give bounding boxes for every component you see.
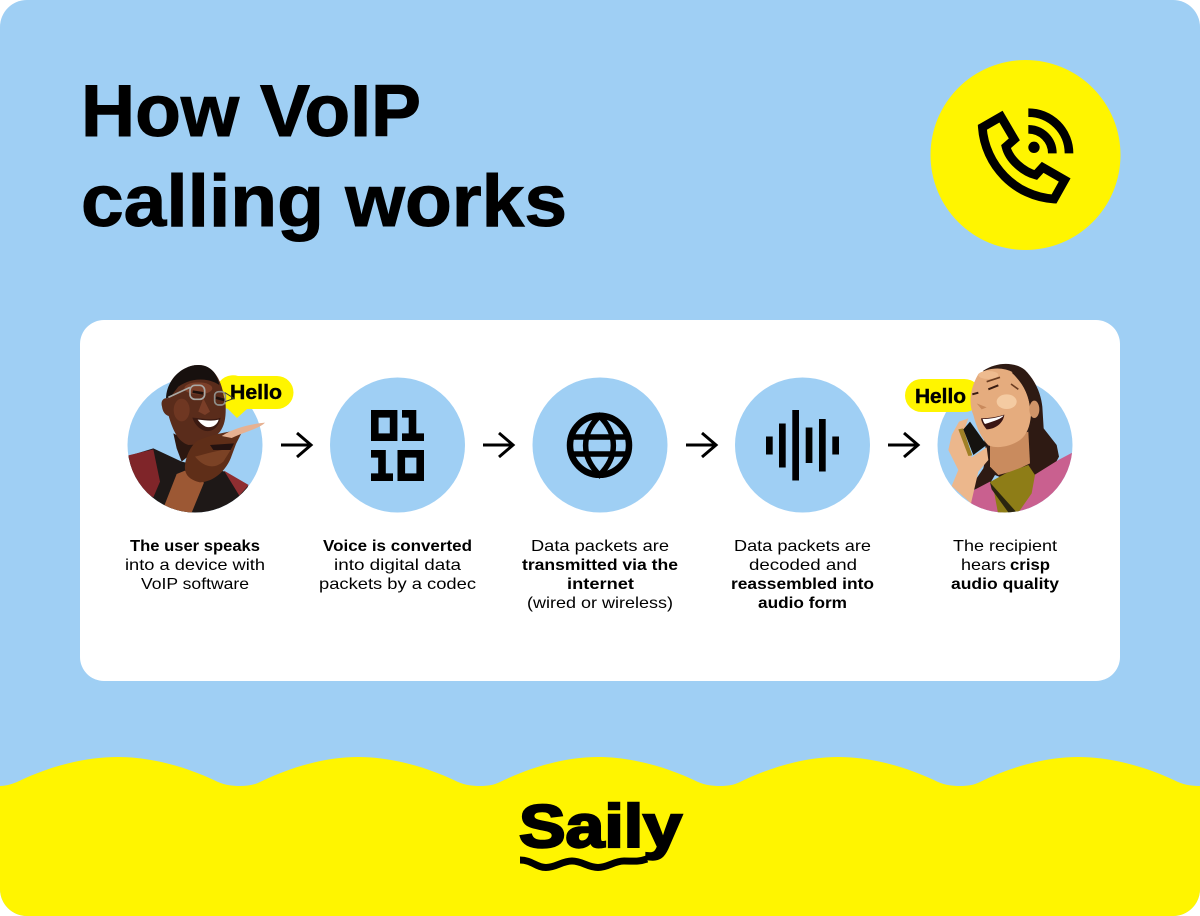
text: step 2 caption: Voice is converted [323, 538, 472, 555]
text: step 3 caption [522, 538, 678, 612]
text: step 4 caption: audio form [758, 595, 847, 612]
woman figure [948, 364, 1075, 515]
text: step 5 caption: hears [961, 557, 1006, 574]
text: step 2 caption: packets by a codec [319, 576, 476, 593]
speech bubble: Hello: Hello [915, 386, 966, 408]
title: calling works [81, 161, 567, 242]
text: step 1 caption: The user speaks [130, 538, 260, 555]
text: step 4 caption: decoded and [749, 557, 857, 574]
speech bubble: Hello [905, 379, 981, 412]
yellow wave footer [0, 757, 1200, 916]
Saily logo: Saily [519, 793, 683, 860]
title [81, 71, 567, 242]
speech bubble: Hello [216, 375, 294, 418]
arrow 4 [888, 433, 918, 457]
text: step 5 caption: crisp [1010, 557, 1050, 574]
text: step 2 caption: into digital data [334, 557, 461, 574]
icon: phone with signal in yellow circle [930, 60, 1120, 250]
text: step 1 caption: into a device with [125, 557, 265, 574]
text: step 4 caption [731, 538, 874, 612]
title: How VoIP [81, 71, 421, 152]
text: step 1 caption [125, 538, 265, 593]
step 5: woman on phone photo with speech bubble [905, 364, 1075, 515]
step 1: man speaking photo with speech bubble [128, 365, 294, 517]
arrow 2 [483, 433, 513, 457]
panel: steps card [80, 320, 1120, 681]
arrow 1 [281, 433, 311, 457]
text: step 3 caption: Data packets are [531, 538, 669, 555]
text: step 4 caption: reassembled into [731, 576, 874, 593]
text: step 5 caption [951, 538, 1059, 593]
step 2: binary icon [330, 378, 465, 512]
man figure [128, 365, 265, 517]
text: step 5 caption: The recipient [953, 538, 1058, 555]
speech bubble: Hello: Hello [230, 382, 282, 404]
arrow 3 [686, 433, 716, 457]
text: step 3 caption: transmitted via the [522, 557, 678, 574]
step 3: globe icon [532, 378, 668, 512]
text: step 3 caption: (wired or wireless) [527, 595, 673, 612]
text: step 1 caption: VoIP software [141, 576, 249, 593]
text: step 4 caption: Data packets are [734, 538, 871, 555]
text: step 3 caption: internet [567, 576, 635, 593]
text: step 5 caption: audio quality [951, 576, 1059, 593]
step 4: sound wave icon [735, 378, 870, 512]
text: step 2 caption [319, 538, 476, 593]
